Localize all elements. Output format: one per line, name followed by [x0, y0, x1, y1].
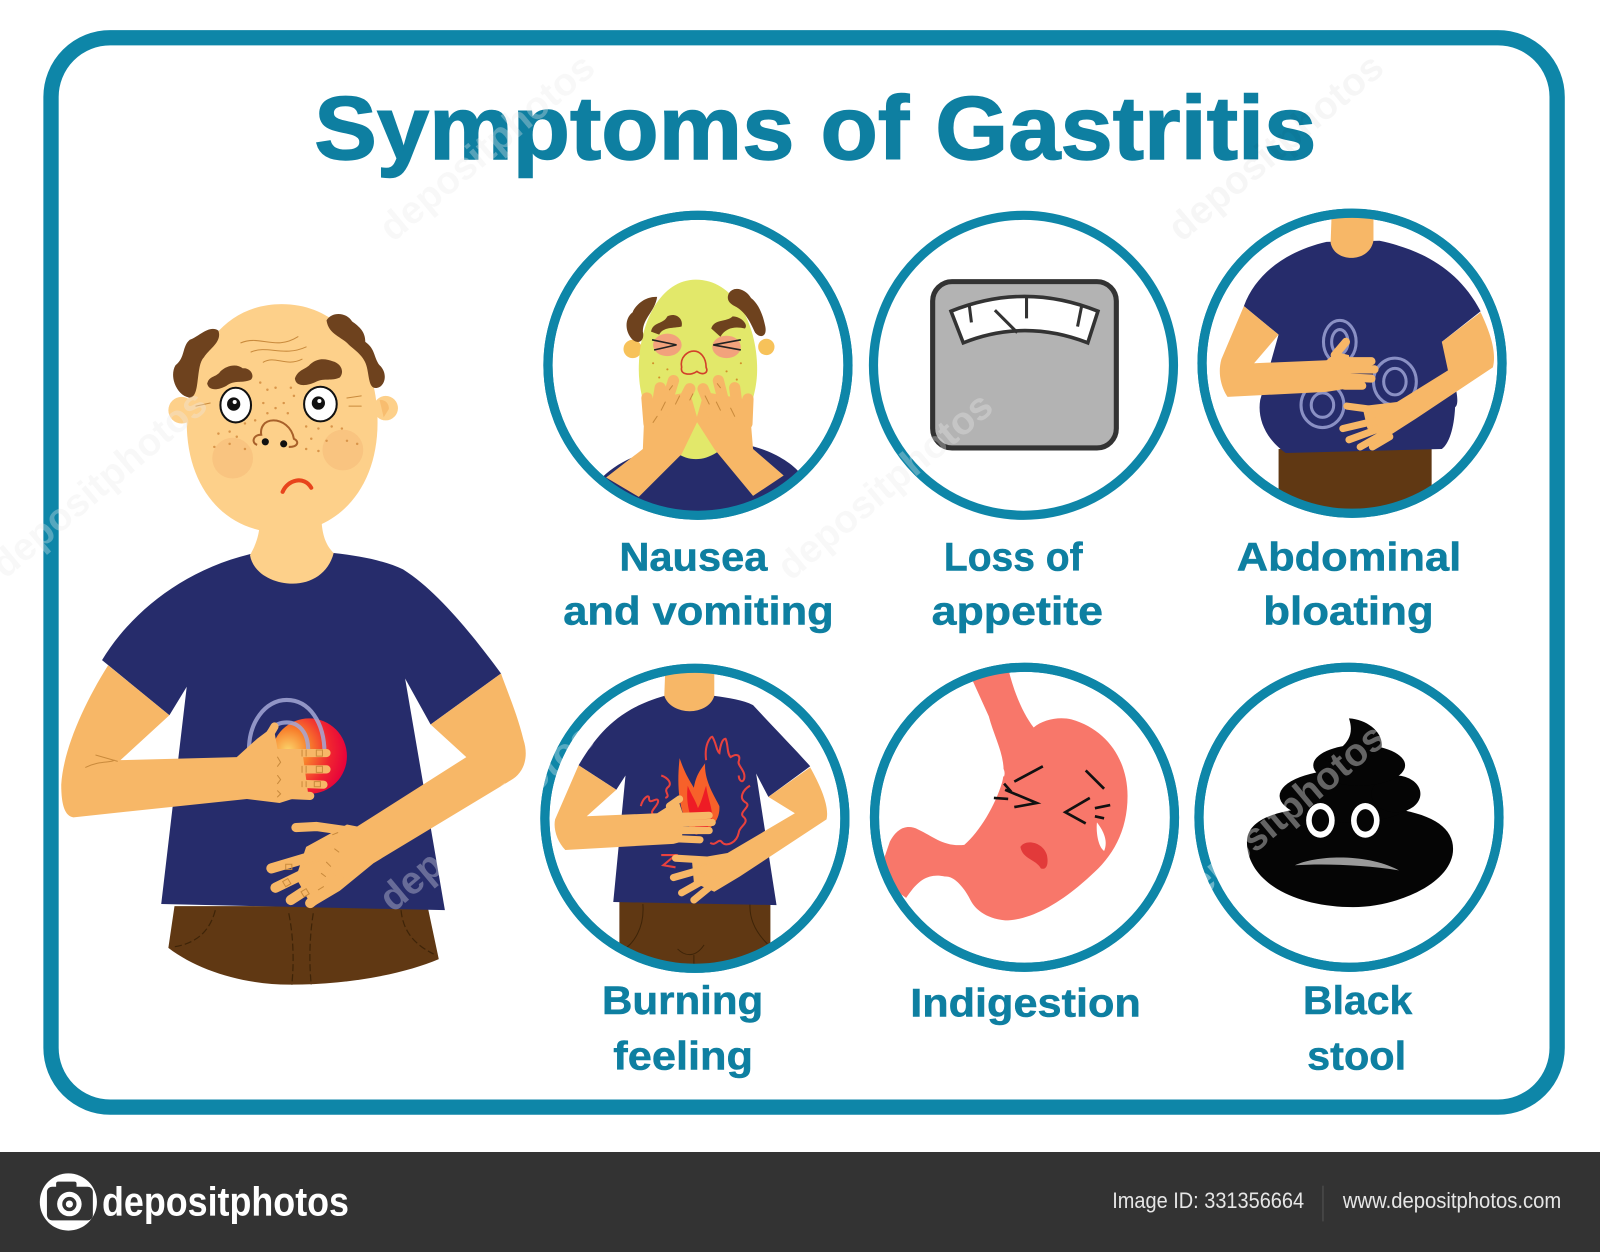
label: black stool: [1303, 979, 1413, 1078]
label: burning feeling: Burning: [602, 979, 763, 1023]
head: [168, 304, 398, 533]
pants: [168, 906, 439, 985]
stomach: [878, 668, 1128, 920]
image id: Image ID: 331356664: [1112, 1188, 1304, 1213]
neck: [664, 668, 714, 711]
arms: [1220, 306, 1352, 397]
watermarks: depositphotos: [371, 716, 603, 920]
right arm and hand: [271, 673, 526, 907]
flame: [678, 758, 719, 835]
left arm and hand: [61, 665, 327, 817]
icon: camera logo: [40, 1173, 97, 1231]
title: Symptoms of Gastritis: [314, 79, 1316, 179]
eyebrows: [207, 359, 342, 389]
label: loss of appetite: appetite: [932, 589, 1103, 633]
watermarks: depositphotos: [1162, 716, 1394, 920]
watermarks: depositphotos: [769, 384, 1001, 589]
label: nausea and vomiting: and vomiting: [563, 589, 834, 633]
neck: [1331, 214, 1373, 258]
brand name: depositphotos: [102, 1178, 349, 1224]
green face: [623, 280, 774, 459]
pain rings: [249, 700, 324, 753]
illustration: man holding stomach: [61, 304, 526, 985]
icon: black stool character: [1247, 718, 1453, 907]
footer bar: [0, 1152, 1600, 1252]
label: abdominal bloating: Abdominal: [1237, 535, 1461, 579]
arms: [555, 765, 684, 850]
watermarks: depositphotos: [371, 45, 603, 250]
panel: nausea and vomiting: [548, 215, 848, 531]
rings: [1301, 320, 1416, 428]
shirt: [579, 696, 810, 905]
shirt: [1244, 241, 1481, 453]
squiggles: [641, 737, 750, 867]
panel: loss of appetite: [873, 215, 1173, 515]
stomach face: [994, 761, 1110, 869]
panel: abdominal bloating: [1202, 213, 1502, 520]
eyes: [220, 387, 337, 422]
watermarks: depositphotos: [1160, 45, 1392, 250]
label: black stool: stool: [1307, 1034, 1406, 1078]
shirt: [604, 446, 798, 511]
neck: [250, 515, 334, 584]
watermarks: [0, 45, 1394, 920]
watermarks: depositphotos: [371, 45, 603, 250]
website: www.depositphotos.com: [1342, 1188, 1561, 1213]
panel: black stool: [1199, 667, 1499, 967]
panel: indigestion: [874, 667, 1174, 967]
label: burning feeling: feeling: [613, 1034, 753, 1078]
hair: [173, 314, 385, 398]
pants: [619, 902, 770, 964]
mouth: [283, 480, 311, 492]
label: nausea and vomiting: Nausea: [619, 535, 768, 579]
panel: burning feeling: [545, 668, 845, 980]
watermarks: depositphotos: [769, 384, 1001, 589]
label: abdominal bloating: [1237, 535, 1461, 633]
t-shirt: [102, 553, 501, 910]
icon: weighing scale: [933, 282, 1116, 448]
nose: [254, 420, 297, 447]
label: indigestion: Indigestion: [910, 981, 1141, 1025]
label: nausea and vomiting: [563, 535, 834, 633]
label: loss of appetite: Loss of: [944, 535, 1083, 579]
label: burning feeling: [602, 979, 763, 1078]
pants: [1278, 449, 1432, 509]
label: black stool: Black: [1303, 979, 1413, 1023]
label: abdominal bloating: bloating: [1263, 589, 1434, 633]
label: loss of appetite: [932, 535, 1103, 633]
hands over mouth: [606, 381, 784, 497]
pain spot: [271, 718, 347, 794]
